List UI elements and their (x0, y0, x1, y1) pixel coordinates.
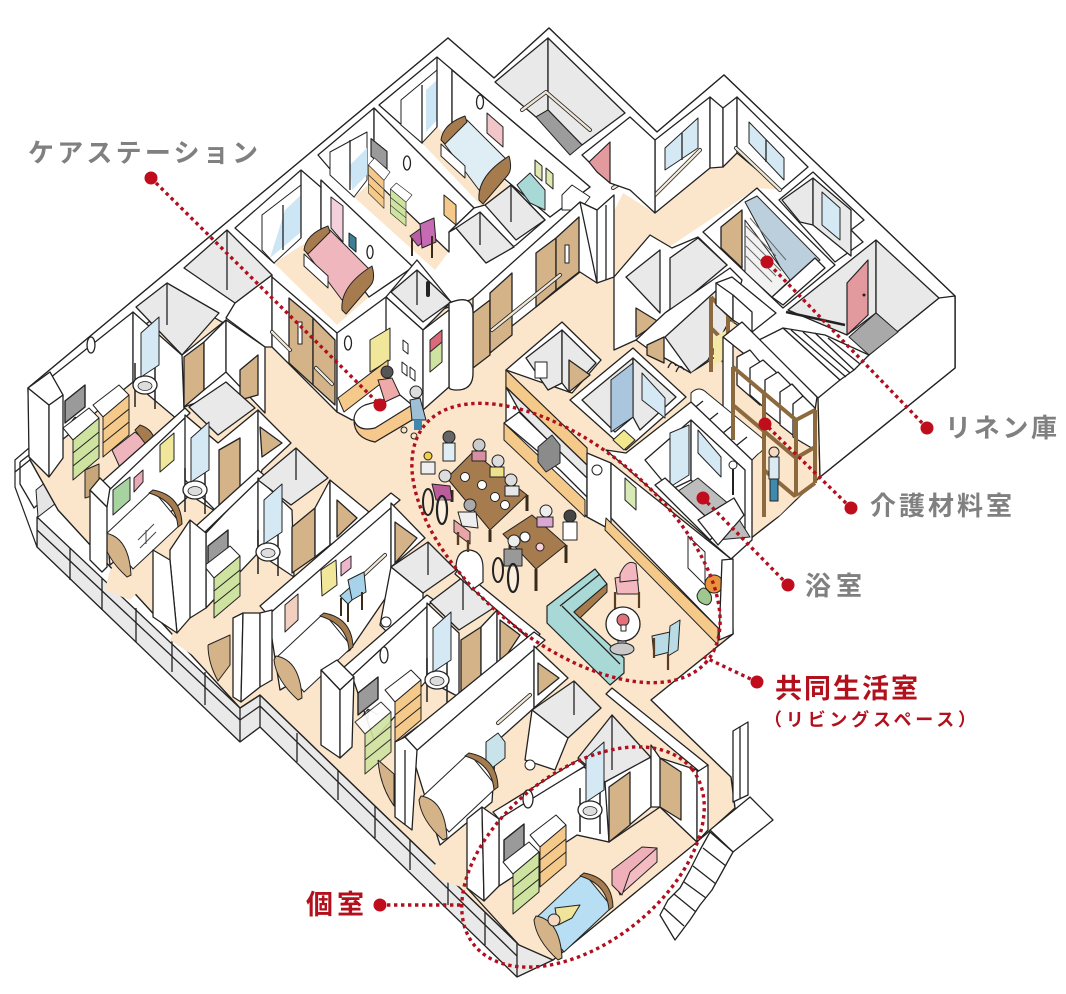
room: stairs with pink door (759, 240, 955, 477)
sink (183, 422, 209, 514)
wall top: upper band (28, 28, 955, 477)
resident yellow (490, 455, 504, 477)
label: linen: リネン庫 (945, 413, 1057, 443)
room F: bed room (395, 632, 601, 890)
resident with chair (454, 499, 478, 552)
kitchen block (504, 370, 587, 517)
wall clock (87, 337, 95, 353)
pictures green (535, 160, 553, 189)
columns (170, 520, 206, 633)
picture yellow (321, 560, 337, 596)
sofa (547, 569, 624, 685)
stairs (759, 328, 869, 398)
picture pink (331, 197, 343, 242)
room: stair well upper right (495, 38, 625, 155)
blue armchair (652, 620, 680, 670)
microwave (538, 435, 560, 472)
back counter (338, 360, 388, 412)
worker (769, 447, 779, 501)
corridor wall with doors upper (473, 195, 614, 368)
round table (606, 607, 640, 655)
resident right (505, 474, 519, 496)
wall clock (476, 95, 484, 109)
room: pink bed room (235, 170, 413, 325)
leader: linen (760, 256, 934, 434)
label: private room: 個室 (306, 890, 364, 920)
bed (419, 753, 498, 840)
wall clock (380, 647, 388, 663)
drawers green (503, 842, 539, 914)
faucets (668, 362, 684, 372)
sink (425, 612, 451, 704)
icon: blue bed (441, 116, 511, 204)
hallway upper right (582, 97, 808, 275)
sink (578, 742, 604, 834)
purple chair (410, 218, 436, 258)
tv (208, 530, 228, 572)
drawers green (355, 702, 391, 774)
picture (444, 195, 456, 225)
dotted ring: living room (363, 350, 769, 736)
label: living sub: （リビングスペース） (764, 709, 976, 730)
pink door (589, 142, 610, 183)
calendar (688, 536, 705, 585)
patient (548, 905, 580, 926)
room: window room right (779, 172, 864, 262)
wooden shelf front (733, 367, 815, 517)
room: linen storage (703, 188, 835, 308)
yellow shelf (370, 328, 390, 372)
column (321, 660, 354, 690)
picture (285, 594, 298, 632)
care station block (226, 275, 449, 442)
corridor wall rims (455, 568, 708, 772)
stair handrail (786, 312, 845, 325)
blue door (611, 363, 633, 432)
staff (563, 510, 577, 540)
leader: care station (144, 172, 386, 412)
pillar and outer wall lower right (456, 550, 773, 940)
leader: private room (374, 898, 462, 912)
drawers orange (385, 670, 421, 742)
yellow mat (613, 430, 635, 450)
wall clock (523, 790, 533, 808)
column (90, 490, 107, 572)
bags row (691, 389, 764, 460)
teal bench (517, 173, 545, 210)
bed (103, 490, 182, 577)
label: bath: 浴室 (805, 571, 862, 601)
wall clock (367, 246, 373, 258)
picture small (134, 470, 143, 492)
label: care material room: 介護材料室 (870, 491, 1012, 521)
pink door (847, 260, 868, 335)
wooden shelf upper (711, 297, 735, 372)
column (467, 807, 484, 901)
room C: TV room (153, 448, 369, 681)
pink armchair (615, 562, 639, 610)
wall clock (344, 336, 352, 350)
columns (233, 613, 243, 702)
wheelchair resident (423, 470, 452, 524)
leader: living (704, 657, 764, 688)
resident (472, 439, 486, 461)
room: blue door washroom (570, 348, 686, 450)
label: care station: ケアステーション (28, 138, 258, 168)
drawers orange (93, 385, 129, 457)
toilet boxes upper middle (386, 185, 545, 330)
room: care material storage (636, 268, 817, 522)
door (660, 758, 681, 820)
label: living: 共同生活室 (775, 674, 918, 704)
boxes on top (716, 277, 776, 332)
blue bed with patient (534, 873, 613, 960)
footboard and bed edge (208, 635, 230, 681)
blue chair (340, 572, 366, 622)
towel shelves (745, 220, 790, 297)
rim and column (723, 322, 817, 410)
room: toilet block by kitchen (506, 322, 601, 393)
bed rails (138, 524, 156, 548)
cart (421, 452, 435, 474)
drawers green (390, 183, 412, 226)
column (28, 388, 49, 477)
picture pink (341, 556, 351, 576)
round pillar corridor (456, 550, 483, 590)
bed rail (402, 726, 418, 752)
pillar round (449, 300, 473, 390)
shower (732, 467, 734, 495)
bath floor (672, 478, 750, 540)
room: bath (606, 402, 752, 559)
wall picture (625, 478, 636, 510)
picture (487, 113, 503, 147)
tv (358, 677, 378, 719)
drawers orange (530, 815, 566, 887)
sink (256, 484, 282, 576)
station doors (289, 298, 313, 385)
window: hallway right (749, 122, 784, 180)
tv (371, 139, 387, 172)
wall signs (402, 340, 415, 381)
doors (473, 300, 490, 368)
room G: individual room (467, 715, 708, 960)
room: top room with blue bed (379, 57, 590, 217)
bathtub (655, 478, 720, 540)
resident pink (537, 505, 553, 527)
leader: bath (696, 492, 794, 592)
bed (274, 613, 353, 700)
central gray room (614, 235, 727, 350)
drawers green (63, 408, 99, 480)
tv (65, 385, 85, 427)
leader: care material (758, 418, 858, 514)
outdoor stairs (660, 832, 733, 940)
dotted ring: private room (421, 703, 745, 994)
blue cabinet (486, 733, 505, 768)
drawers orange (368, 158, 390, 208)
room D: bed room (233, 493, 456, 720)
footboard (378, 760, 394, 806)
window (642, 373, 665, 418)
room: second room with purple chair (318, 108, 474, 270)
wheelchair resident (493, 535, 522, 592)
dining table 1 with residents (421, 431, 527, 552)
plants (697, 575, 723, 605)
window: hallway left (665, 118, 698, 170)
rail on wall (356, 555, 385, 582)
room A: TV and orange drawers (28, 230, 272, 500)
icon: pink bed (304, 226, 374, 314)
room B: bed room (90, 382, 291, 600)
drawers green (204, 546, 240, 618)
wall clock (404, 156, 410, 170)
picture yellow (160, 433, 174, 472)
staff member (443, 431, 455, 461)
nurse (378, 366, 400, 402)
tv (504, 824, 524, 866)
column (395, 737, 417, 830)
pink sofa (612, 847, 657, 895)
pink bed back (112, 432, 150, 472)
bath window (670, 425, 689, 487)
wall rail (498, 695, 530, 723)
sink (133, 317, 159, 409)
picture landscape (113, 477, 130, 515)
blue tag (349, 233, 356, 252)
balcony gray band (37, 517, 553, 977)
balcony railing corner (15, 442, 60, 547)
visitor with walker (401, 386, 426, 439)
living wall with counter (587, 453, 733, 645)
green red chart (430, 330, 442, 360)
dining table 2 with residents (493, 505, 577, 592)
white boxes row (737, 350, 815, 450)
room E: TV room (321, 577, 530, 806)
reception desk (354, 395, 412, 442)
